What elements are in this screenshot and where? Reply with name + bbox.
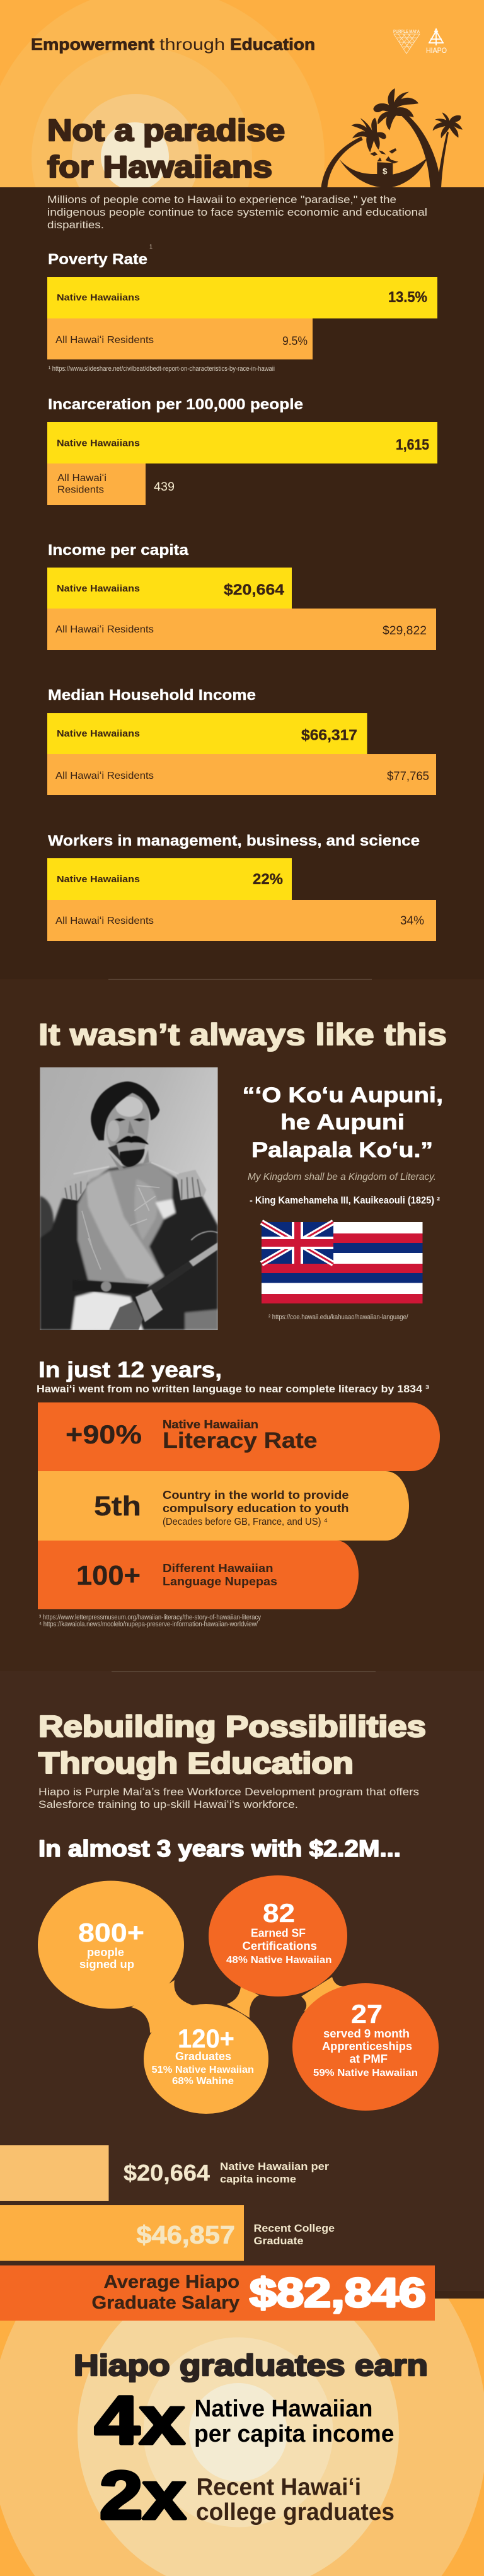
header title: Empowerment — [31, 35, 154, 54]
stat bar: 100+: Different Hawaiian — [163, 1561, 274, 1575]
title: Not a paradise for Hawaiians: for Hawaiians — [47, 151, 272, 184]
chart: workers in management: Workers in management, business, and science — [48, 832, 420, 849]
chart: income per capita: Income per capita — [48, 542, 189, 559]
logo: Hiapo — [426, 29, 447, 55]
panel: history of literacy — [37, 979, 446, 1628]
stat bar: literacy rate — [38, 1402, 440, 1471]
footnotes 3 and 4 — [39, 1614, 261, 1628]
stat bar: 5th — [38, 1471, 409, 1541]
quote attribution: - King Kamehameha III, Kauikeaouli (1825) ² — [250, 1196, 440, 1206]
program description: Hiapo is Purple Maiʻa’s free Workforce Development program that offers — [38, 1786, 419, 1798]
chart: poverty rate — [47, 243, 437, 373]
chart: poverty rate: ¹ https://www.slideshare.net/civilbeat/dbedt-report-on-characteristics-by-race-in-hawaii — [49, 365, 275, 373]
salary bar: native Hawaiian per capita: capita income — [220, 2174, 296, 2185]
logo: Purple Maia: PURPLE MAI‘A — [393, 30, 420, 34]
chart: poverty rate: 13.5% — [388, 289, 427, 306]
salary bar: recent college graduate: Recent College — [253, 2223, 335, 2234]
title: Not a paradise for Hawaiians — [47, 114, 285, 184]
bubble: 27 apprenticeships: 59% Native Hawaiian — [313, 2068, 418, 2078]
icon: Hawaiian flag — [262, 1222, 422, 1303]
chart: workers in management: 34% — [400, 914, 424, 928]
chart: incarceration — [47, 396, 437, 505]
stat: 4x native Hawaiian per capita income: 4x — [95, 2382, 185, 2458]
stat: 4x native Hawaiian per capita income — [95, 2382, 395, 2458]
header title: through — [159, 35, 225, 54]
panel: hero banner — [0, 0, 484, 187]
panel: disparities — [0, 187, 484, 979]
heading: Rebuilding Possibilities Through Education: Rebuilding Possibilities — [38, 1710, 426, 1743]
bubble: 120+ graduates: 51% Native Hawaiian — [151, 2065, 254, 2075]
stat: 2x recent Hawaii college graduates: college graduates — [196, 2499, 395, 2526]
chart: income per capita: Native Hawaiians — [57, 583, 140, 594]
salary bar: native Hawaiian per capita: Native Hawaiian per — [220, 2161, 330, 2172]
quote translation: My Kingdom shall be a Kingdom of Literacy. — [248, 1172, 436, 1182]
bubble: 800+ signed up: signed up — [79, 1958, 134, 1971]
stat bar: 5th: 5th — [94, 1491, 141, 1522]
icon: palm trees, hammock and money bag — [321, 88, 463, 188]
chart: poverty rate: 9.5% — [282, 334, 308, 348]
chart: poverty rate: 1 — [149, 243, 153, 250]
footnote 2: ² https://coe.hawaii.edu/kahuaao/hawaiian-language/ — [268, 1314, 408, 1321]
footnotes 3 and 4: ³ https://www.letterpressmuseum.org/hawaiian-literacy/the-story-of-hawaiian-literacy — [39, 1614, 261, 1621]
panel: Hiapo graduates earn — [0, 2265, 484, 2576]
bubble: 27 apprenticeships — [292, 1983, 439, 2111]
chart: poverty rate: All Hawaiʻi Residents — [55, 335, 154, 346]
bubble: 120+ graduates: Graduates — [175, 2050, 231, 2063]
bubble: 82 certifications: 82 — [263, 1898, 295, 1928]
quote — [242, 1083, 443, 1162]
chart: workers in management: 22% — [253, 871, 283, 888]
salary bar: recent college graduate: Graduate — [253, 2235, 304, 2247]
logo: Hiapo: HIAPO — [426, 47, 447, 55]
panel: Hiapo program — [0, 1671, 484, 2299]
bubble: 120+ graduates — [144, 2004, 268, 2114]
chart: incarceration: Incarceration per 100,000 people — [48, 396, 303, 413]
chart: income per capita — [47, 542, 436, 650]
stat bar: 5th: compulsory education to youth — [163, 1501, 349, 1515]
chart: workers in management: All Hawaiʻi Residents — [55, 916, 154, 926]
program description — [38, 1786, 419, 1810]
header title — [31, 35, 315, 54]
salary bar: recent college graduate: $46,857 — [136, 2221, 235, 2249]
stat bar: 5th: Country in the world to provide — [163, 1488, 349, 1501]
chart: median household income: All Hawaiʻi Residents — [55, 771, 154, 781]
chart: median household income: $66,317 — [301, 726, 357, 744]
heading: Hiapo graduates earn: Hiapo graduates earn — [74, 2348, 428, 2382]
chart: median household income: $77,765 — [387, 769, 429, 783]
subheading: Hawaiʻi went from no written language to near complete literacy by 1834 ³ — [37, 1384, 430, 1395]
chart: income per capita: $29,822 — [383, 624, 427, 638]
salary bar: Hiapo graduate: $82,846 — [250, 2270, 426, 2316]
salary bar: Hiapo graduate — [0, 2265, 435, 2321]
chart: incarceration: 1,615 — [396, 436, 429, 453]
portrait of King Kamehameha III — [40, 1067, 218, 1331]
bubble: 800+ signed up: 800+ — [78, 1918, 144, 1947]
intro paragraph: disparities. — [47, 219, 104, 231]
quote: he Aupuni — [280, 1110, 405, 1134]
stat bar: 100+: Language Nupepas — [163, 1575, 277, 1588]
chart: incarceration: All Hawaiʻi — [57, 473, 107, 484]
salary bar: Hiapo graduate: Graduate Salary — [92, 2293, 239, 2313]
stat: 4x native Hawaiian per capita income: per capita income — [194, 2421, 395, 2447]
quote: “ʻO Koʻu Aupuni, — [242, 1083, 443, 1107]
salary bar: Hiapo graduate: Average Hiapo — [103, 2272, 239, 2292]
heading: In just 12 years: In just 12 years, — [38, 1358, 222, 1382]
chart: median household income — [47, 687, 436, 795]
salary bar: native Hawaiian per capita — [0, 2145, 330, 2201]
intro paragraph: Millions of people come to Hawaii to experience "paradise," yet the — [47, 194, 396, 206]
chart: workers in management — [47, 832, 436, 941]
chart: poverty rate: Poverty Rate — [48, 251, 147, 268]
chart: incarceration: 439 — [154, 480, 175, 494]
stat bar: literacy rate: Native Hawaiian — [163, 1418, 258, 1431]
stat: 2x recent Hawaii college graduates: 2x — [100, 2457, 186, 2533]
bubble connectors — [131, 1977, 344, 2033]
stat bar: literacy rate: Literacy Rate — [163, 1428, 318, 1453]
stat: 2x recent Hawaii college graduates: Recent Hawaiʻi — [197, 2474, 361, 2501]
heading: Rebuilding Possibilities Through Education: Through Education — [38, 1746, 354, 1780]
stat: 2x recent Hawaii college graduates — [100, 2457, 395, 2533]
chart: incarceration: Native Hawaiians — [57, 438, 140, 449]
bubble: 800+ signed up — [38, 1880, 184, 2009]
stat bar: literacy rate: +90% — [66, 1419, 142, 1449]
bubble: 82 certifications: Earned SF — [251, 1927, 306, 1940]
chart: income per capita: $20,664 — [224, 581, 285, 598]
chart: income per capita: All Hawaiʻi Residents — [55, 624, 154, 635]
heading: Rebuilding Possibilities Through Education — [38, 1710, 426, 1780]
bubble: 120+ graduates: 120+ — [178, 2024, 234, 2053]
bubble: 27 apprenticeships: at PMF — [349, 2053, 388, 2065]
title: Not a paradise for Hawaiians: Not a paradise — [47, 114, 285, 148]
stat bar: 100+: 100+ — [76, 1560, 141, 1591]
bubble: 27 apprenticeships: served 9 month — [323, 2027, 410, 2040]
bubble: 82 certifications: 48% Native Hawaiian — [226, 1955, 331, 1966]
icon: palm trees, hammock and money bag: $ — [383, 166, 388, 176]
stat bar: 5th: (Decades before GB, France, and US) ⁴ — [163, 1517, 328, 1527]
bubble: 82 certifications: Certifications — [242, 1940, 317, 1952]
intro paragraph: indigenous people continue to face systemic economic and educational — [47, 206, 427, 218]
heading: In almost 3 years: In almost 3 years with $2.2M... — [38, 1836, 401, 1862]
program description: Salesforce training to up-skill Hawaiʻi's workforce. — [38, 1798, 298, 1810]
chart: median household income: Native Hawaiians — [57, 728, 140, 739]
intro paragraph — [47, 194, 427, 231]
chart: incarceration: Residents — [57, 484, 104, 496]
salary bar: recent college graduate — [0, 2205, 335, 2261]
bubble: 800+ signed up: people — [87, 1946, 124, 1959]
bubble: 120+ graduates: 68% Wahine — [172, 2076, 234, 2087]
bubble: 27 apprenticeships: Apprenticeships — [322, 2040, 412, 2053]
chart: workers in management: Native Hawaiians — [57, 874, 140, 885]
bubble: 82 certifications — [209, 1875, 347, 1996]
footnotes 3 and 4: ⁴ https://kawaiola.news/moolelo/nupepa-preserve-information-hawaiian-worldview/ — [39, 1621, 258, 1628]
header title: Education — [230, 35, 315, 54]
bubble: 27 apprenticeships: 27 — [351, 1999, 383, 2029]
chart: median household income: Median Household Income — [48, 687, 256, 704]
logo: Purple Maia — [393, 30, 420, 54]
quote: Palapala Koʻu.” — [251, 1138, 433, 1162]
salary bar: native Hawaiian per capita: $20,664 — [124, 2160, 210, 2186]
stat: 4x native Hawaiian per capita income: Native Hawaiian — [194, 2396, 373, 2422]
stat bar: 100+ — [38, 1541, 359, 1609]
heading: It wasn't always like this: It wasn’t always like this — [38, 1018, 447, 1052]
chart: poverty rate: Native Hawaiians — [57, 293, 140, 303]
